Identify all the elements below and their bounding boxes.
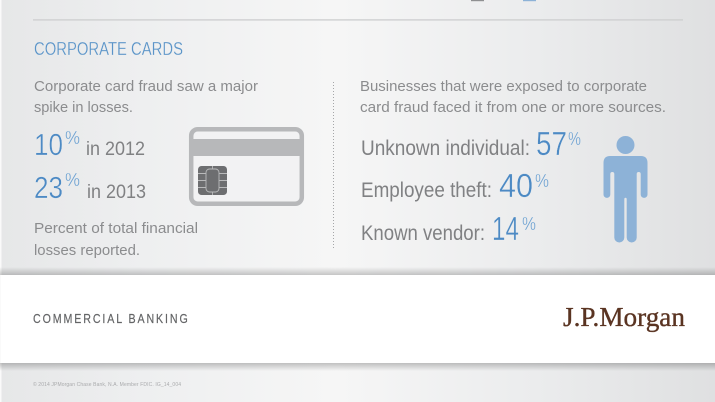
- text: intro: Corporate card fraud saw a major: [34, 78, 258, 95]
- stat: unknown individual: 57: [536, 125, 567, 162]
- stat: 10% in 2012: [34, 127, 145, 162]
- stat: known vendor: %: [522, 214, 536, 234]
- stat: unknown individual: %: [568, 129, 581, 149]
- divider: dotted: [332, 82, 334, 248]
- panel: right column: [360, 78, 666, 247]
- stat: 10% in 2012: 10: [34, 127, 63, 162]
- stat: known vendor: 14: [492, 210, 519, 247]
- cropped chart marks: [471, 0, 536, 1]
- text: percent note: losses reported.: [34, 242, 140, 259]
- text: intro: Businesses that were exposed to corporate: [360, 78, 647, 95]
- stat: 10% in 2012: in 2012: [86, 139, 145, 160]
- stat: unknown individual: [361, 125, 581, 162]
- text: intro: card fraud faced it from one or more sources.: [360, 99, 666, 116]
- stat: employee theft: [361, 167, 549, 204]
- icon: chip: [198, 166, 227, 195]
- copyright: © 2014 JPMorgan Chase Bank, N.A. Member FDIC. IG_14_004: [33, 381, 181, 388]
- icon: credit card: [191, 129, 302, 204]
- footer shadows: [0, 267, 715, 371]
- stat: 10% in 2012: %: [65, 128, 80, 148]
- stat: known vendor: [361, 210, 536, 247]
- stat: employee theft: %: [535, 171, 549, 191]
- logo: J.P.Morgan: J.P.Morgan: [563, 302, 685, 332]
- text: intro: spike in losses.: [34, 99, 133, 116]
- panel: left column: [34, 78, 302, 259]
- stat: known vendor: Known vendor:: [361, 222, 485, 245]
- stat: employee theft: Employee theft:: [361, 179, 492, 202]
- stat: unknown individual: Unknown individual:: [361, 137, 530, 160]
- stat: 23% in 2013: %: [65, 170, 80, 190]
- stat: 23% in 2013: in 2013: [87, 182, 146, 203]
- heading: corporate cards: CORPORATE CARDS: [34, 39, 183, 59]
- text: percent note: [34, 220, 198, 259]
- text: commercial banking: COMMERCIAL BANKING: [33, 311, 190, 326]
- panel: footer band: [1, 275, 715, 363]
- stat: employee theft: 40: [499, 167, 533, 204]
- text: intro: [360, 78, 666, 116]
- stat: 23% in 2013: [34, 170, 146, 205]
- text: intro: [34, 78, 258, 116]
- text: percent note: Percent of total financial: [34, 220, 198, 237]
- stat: 23% in 2013: 23: [34, 170, 63, 205]
- icon: person: [604, 136, 648, 242]
